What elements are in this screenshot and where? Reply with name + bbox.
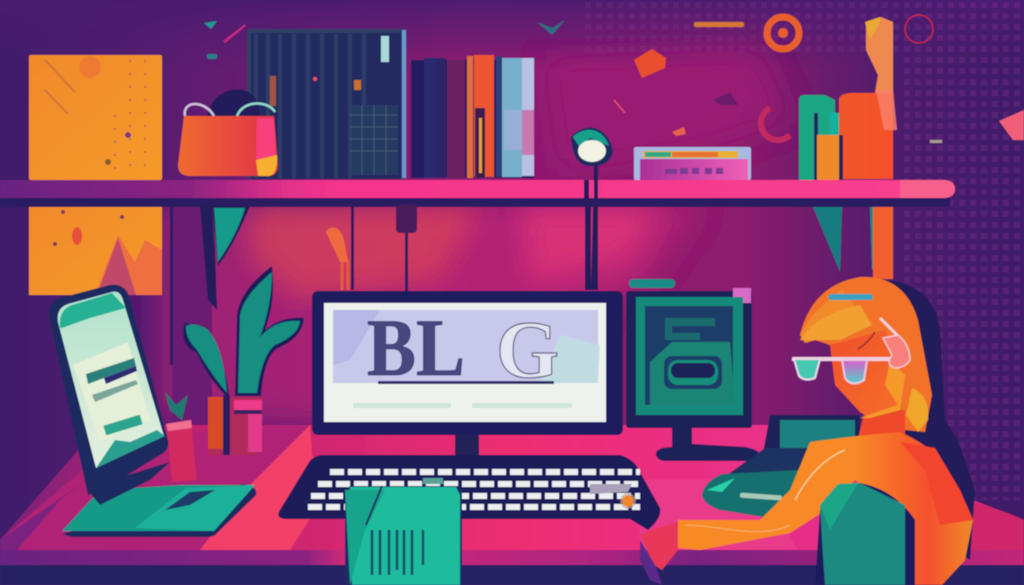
hand: [640, 522, 678, 570]
handbag: [178, 89, 278, 176]
chair: [885, 280, 975, 560]
tablet stand and base: [62, 462, 256, 537]
orange poster lower: [29, 205, 162, 295]
teal notepad on desk: [345, 478, 462, 585]
orange poster upper: [29, 55, 162, 180]
pot small: [165, 392, 197, 482]
wall supports and cables: [170, 205, 417, 365]
laptop right: [702, 415, 860, 518]
desk surface: [0, 425, 1024, 585]
person: [640, 277, 975, 585]
face: [830, 330, 905, 418]
monitor title: BLG: [367, 302, 559, 395]
monitor title: BLG: G: [496, 304, 559, 395]
lamp pole front: [584, 180, 598, 200]
headphone: [883, 335, 910, 368]
hanging leaves under shelf: [200, 206, 893, 310]
sunglasses: [792, 357, 900, 384]
fringe: [800, 290, 868, 343]
neck: [855, 410, 905, 450]
dark server cabinet: [247, 29, 406, 179]
keyboard: [278, 455, 660, 530]
hair: [800, 277, 932, 432]
main monitor: [312, 291, 623, 456]
second monitor: [626, 279, 760, 461]
books: [411, 55, 534, 178]
router box: [634, 147, 751, 180]
plant in pot: [183, 266, 304, 455]
hair lock: [906, 388, 928, 432]
desk lamp: [571, 128, 613, 290]
sweater: [678, 432, 973, 585]
wall decorations: [204, 15, 1024, 143]
tablet: [49, 285, 168, 495]
shelf books right: [799, 17, 897, 180]
shelf board: [0, 180, 955, 207]
monitor title: BLG: BL: [367, 302, 465, 393]
inner top: [815, 483, 915, 585]
eye line: [858, 332, 875, 349]
